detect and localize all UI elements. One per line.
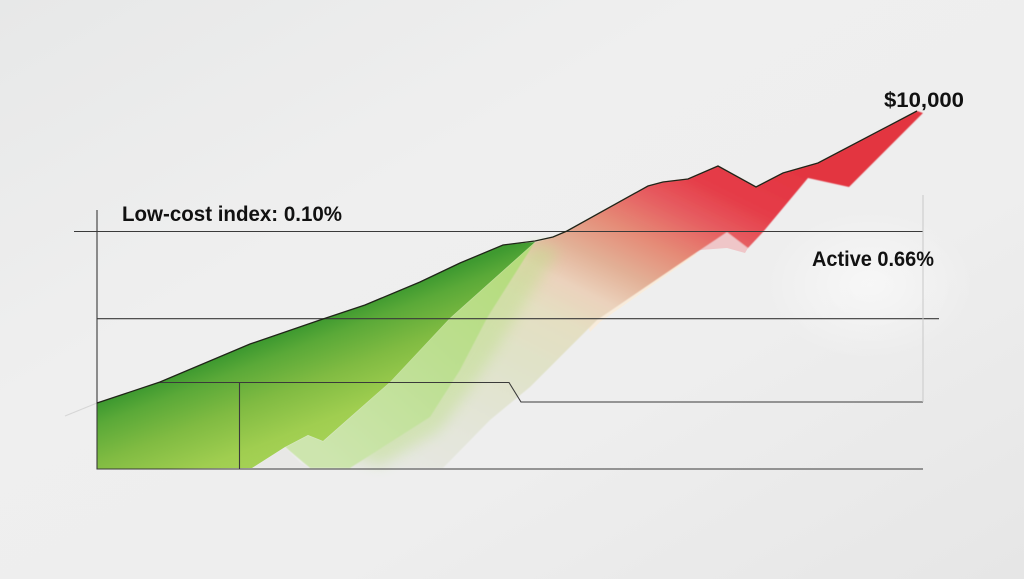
fading band: red to pale	[340, 111, 923, 468]
label: low-cost index: Low-cost index: 0.10%	[122, 203, 342, 226]
axis and grid lines	[74, 210, 939, 469]
peach edge under band	[588, 250, 697, 332]
light green glow	[340, 244, 560, 466]
green solid band	[97, 242, 535, 469]
pale pink tab	[690, 232, 748, 254]
right reference line	[922, 195, 924, 402]
background glow behind active label	[765, 210, 975, 360]
small pale wedge at base	[252, 447, 310, 468]
label: active: Active 0.66%	[812, 248, 934, 271]
label: final value: $10,000	[884, 89, 964, 112]
faint stroke left of chart	[65, 403, 97, 416]
light green overlay	[285, 242, 535, 468]
curve outline	[97, 111, 917, 403]
